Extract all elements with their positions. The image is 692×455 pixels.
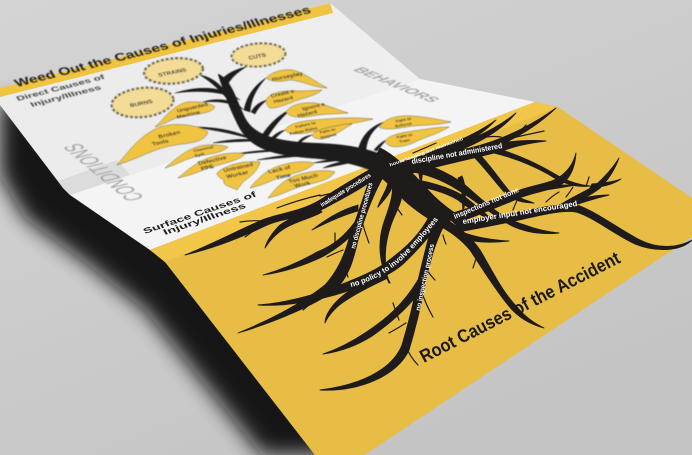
circle: burns <box>110 85 175 120</box>
leaf: fails to enforce: Enforce <box>394 121 413 128</box>
leaf: too much work <box>268 171 335 198</box>
leaf: lack of time: Time <box>275 173 293 181</box>
leaf: defective ppe: PPE <box>200 164 215 172</box>
leaf: create a hazard <box>266 89 322 108</box>
circle: burns: BURNS <box>129 99 154 109</box>
leaf: fails to train <box>385 127 449 147</box>
leaf: create a hazard: Hazard <box>273 96 294 105</box>
leaf: untrained worker: Worker <box>226 170 250 180</box>
leaf: lack of time <box>250 162 315 188</box>
root twigs <box>240 125 589 365</box>
heading: surface causes: Surface Causes of <box>141 190 258 236</box>
leaf: horseplay: Horseplay <box>271 71 305 83</box>
panel: fold shading <box>58 160 132 195</box>
heading: surface causes <box>141 190 258 237</box>
leaf: fails to inspect: Inspect <box>320 132 338 140</box>
panel: middle fold <box>70 79 535 250</box>
leaf: fails to inspect <box>312 124 352 140</box>
leaf: defective ppe: Defective <box>197 155 228 167</box>
root label: no discipline procedures: no discipline procedures <box>350 182 375 250</box>
heading: root causes: Root Causes of the Accident <box>416 248 624 367</box>
leaf: ignore a hazard: Hazard <box>297 110 318 119</box>
leaf: unguarded machine: Machine <box>176 110 201 120</box>
heading: direct causes: Injury/Illness <box>29 83 104 109</box>
label: behaviors: BEHAVIORS <box>348 66 443 104</box>
leaf: ignore a hazard <box>286 102 348 119</box>
tree trunk and branches <box>175 67 395 182</box>
label: conditions: CONDITIONS <box>58 142 151 203</box>
circle: strains <box>143 56 204 86</box>
leaf: fails to train: Fails to <box>396 132 414 139</box>
leaf: unguarded machine: Unguarded <box>176 102 209 114</box>
panel: yellow roots <box>150 102 692 455</box>
leaf: chemical spill: Chemical <box>193 144 214 153</box>
leaf: lack of time: Lack of <box>267 165 292 175</box>
circle: cuts: CUTS <box>248 53 267 61</box>
tree roots <box>185 108 692 390</box>
leaf: fails to enforce: Fails to <box>395 116 413 123</box>
leaf: failure to follow rules: Failure to <box>294 120 317 129</box>
root label: no inspection process: no inspection process <box>415 243 436 311</box>
leaf: unguarded machine <box>155 102 215 127</box>
leaf: too much work: Too Much <box>288 173 320 185</box>
leaf: fails to train: Train <box>398 138 411 144</box>
root label: inadequate procedures: inadequate procedures <box>319 172 373 209</box>
root label: employer input not encouraged: employer input not encouraged <box>462 199 578 226</box>
leaf: fails to inspect: Fails to <box>319 127 337 135</box>
heading: direct causes: Direct Causes of <box>15 73 107 103</box>
leaf: broken tools: Broken <box>158 130 182 140</box>
leaf: untrained worker <box>217 162 260 190</box>
leaf: defective ppe <box>178 153 245 178</box>
panel: upper fold <box>0 3 420 195</box>
circle: strains: STRAINS <box>158 68 188 78</box>
title: Weed Out the Causes of Injuries/Illnesses <box>12 3 313 89</box>
leaf: broken tools <box>117 125 208 165</box>
heading: direct causes <box>15 73 107 109</box>
root label: small root: housekeeping not maintained <box>389 136 464 167</box>
leaf: horseplay <box>266 70 327 88</box>
leaf: chemical spill <box>165 144 228 168</box>
root label: inspections not done: inspections not done <box>452 185 520 221</box>
upper tree area <box>12 3 451 203</box>
title band <box>0 3 333 97</box>
root label: no policy to involve employees: no policy to involve employees <box>350 218 438 287</box>
paper shadow <box>0 100 345 455</box>
leaf: too much work: Work <box>294 181 312 189</box>
leaf: fails to enforce <box>379 116 451 129</box>
leaf: untrained worker: Untrained <box>223 162 255 174</box>
leaf: chemical spill: Spill <box>194 152 205 158</box>
leaf: create a hazard: Create a <box>270 89 296 99</box>
leaf: ignore a hazard: Ignore a <box>301 102 327 112</box>
leaf: broken tools: Tools <box>151 139 171 147</box>
leaf: failure to follow rules: Follow Rules <box>289 125 319 136</box>
root label: discipline not administered: discipline not administered <box>411 141 503 166</box>
yellow fold highlight <box>150 102 558 262</box>
heading: surface causes: Injury/Illness <box>161 201 248 237</box>
circle: cuts <box>231 42 286 68</box>
leaf: failure to follow rules <box>285 118 373 136</box>
